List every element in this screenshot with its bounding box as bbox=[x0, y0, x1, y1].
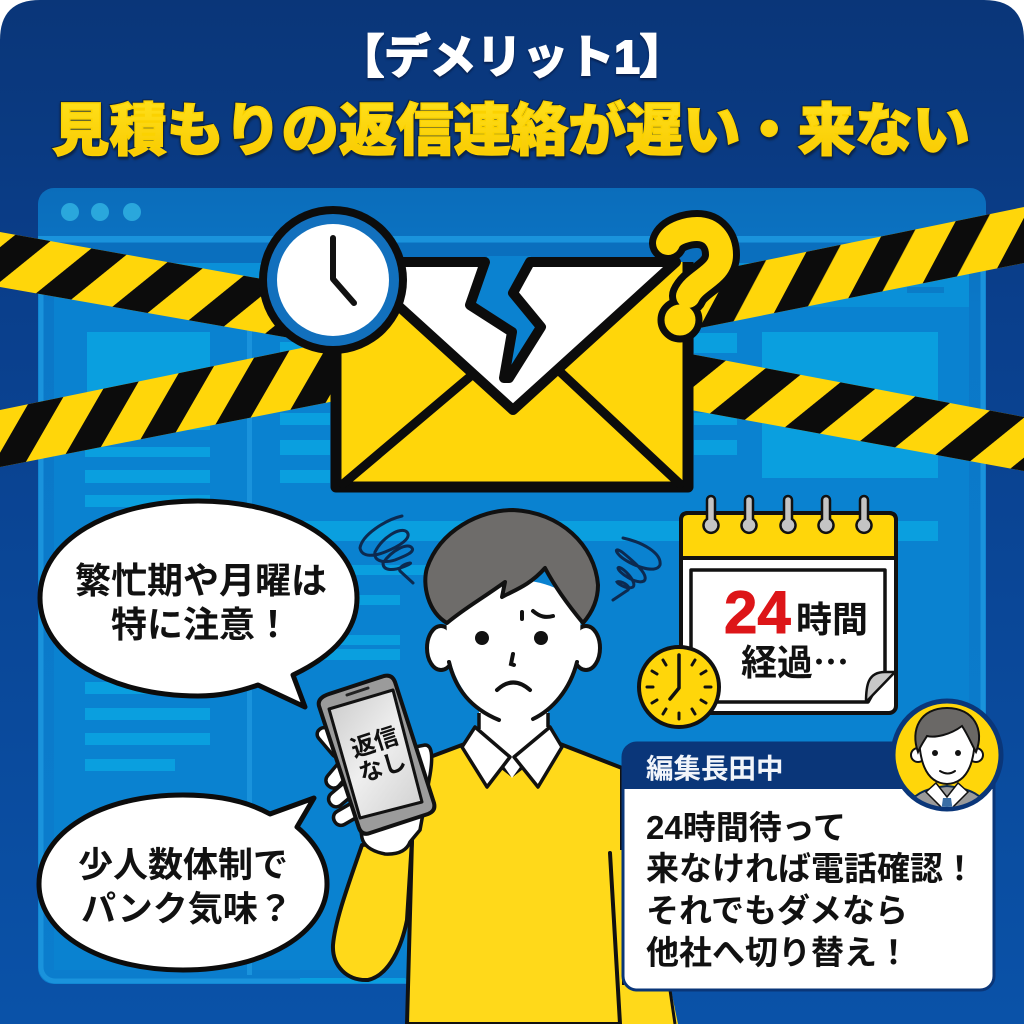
callout text: それでもダメなら bbox=[646, 892, 908, 929]
collar bbox=[462, 727, 510, 787]
callout: editor in chief: 編集長田中 bbox=[646, 753, 784, 784]
tape: upper left bbox=[0, 232, 290, 338]
phone text: 返信 bbox=[348, 723, 402, 763]
speech bubble: small staff: 少人数体制で bbox=[78, 846, 288, 885]
speech bubble: busy season: 特に注意！ bbox=[111, 604, 291, 645]
page curl bbox=[866, 672, 895, 702]
callout text bbox=[646, 809, 976, 971]
icon: stress swirl right bbox=[613, 538, 660, 600]
eyes bbox=[475, 631, 489, 645]
nose bbox=[511, 654, 514, 665]
callout text: 他社へ切り替え！ bbox=[646, 934, 910, 971]
callout text: 24時間待って bbox=[646, 809, 846, 846]
tape: upper right bbox=[660, 207, 1024, 336]
mouth bbox=[497, 682, 530, 690]
hand bbox=[315, 725, 432, 854]
phone text bbox=[348, 723, 410, 788]
icon: calendar bbox=[681, 496, 896, 713]
ears bbox=[427, 626, 455, 670]
calendar text: 24 bbox=[724, 579, 791, 646]
icon: calendar: 経過… bbox=[741, 634, 849, 686]
title bbox=[52, 31, 970, 163]
speech bubble: busy season: 繁忙期や月曜は bbox=[75, 560, 327, 601]
rings bbox=[704, 496, 872, 533]
icon: question mark bbox=[661, 229, 721, 339]
hair bbox=[425, 510, 598, 623]
tape: lower left bbox=[0, 340, 340, 467]
icon: stress swirl left bbox=[360, 516, 413, 583]
speech bubble: small staff bbox=[39, 795, 327, 970]
speech bubble: small staff: パンク気味？ bbox=[81, 890, 293, 929]
person: worried man bbox=[315, 510, 678, 1024]
left arm bbox=[333, 840, 412, 980]
icon: calendar: 時間 bbox=[796, 599, 868, 640]
icon: broken envelope bbox=[336, 256, 688, 487]
icon: editor avatar bbox=[893, 701, 1001, 812]
phone text: なし bbox=[356, 747, 410, 788]
heading: demerit 1: 【デメリット1】 bbox=[338, 31, 686, 83]
callout header bbox=[622, 743, 995, 789]
tape: lower right bbox=[680, 352, 1024, 471]
icon: clock bbox=[259, 206, 407, 354]
icon: small yellow clock bbox=[639, 647, 719, 727]
face bbox=[447, 580, 580, 718]
phone bbox=[319, 676, 434, 834]
right sweater side bbox=[615, 850, 678, 1024]
heading: main title: 見積もりの返信連絡が遅い・来ない bbox=[52, 99, 970, 163]
panel: browser window background bbox=[38, 188, 986, 984]
brow bbox=[522, 611, 553, 619]
sheet bbox=[691, 570, 885, 702]
callout text: 来なければ電話確認！ bbox=[646, 850, 976, 887]
speech bubble: busy season bbox=[40, 501, 357, 707]
callout: editor in chief bbox=[622, 743, 995, 990]
sweater body bbox=[407, 742, 622, 1024]
neck bbox=[479, 700, 548, 778]
